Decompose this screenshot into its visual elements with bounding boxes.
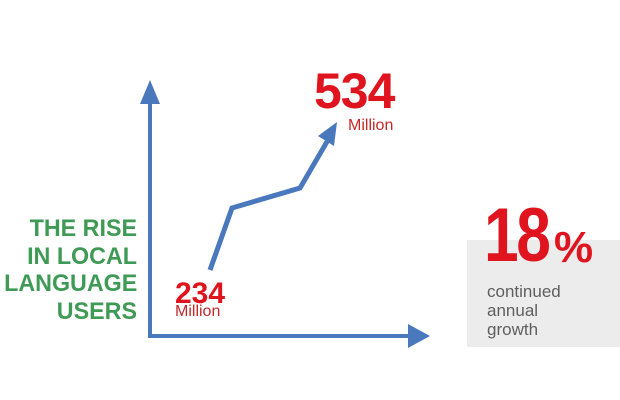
text: 18: 18 (484, 193, 548, 278)
text: 234: 234 (175, 277, 225, 310)
axis: vertical (140, 80, 160, 337)
panel: growth box (467, 240, 620, 347)
text: continued annual growth: annual (487, 301, 538, 320)
text: Million (234): Million (175, 303, 220, 320)
text: continued annual growth: growth (487, 320, 538, 339)
heading: the rise in local language users: THE RISE (30, 215, 137, 242)
heading: the rise in local language users (4, 215, 137, 324)
heading: the rise in local language users: LANGUAGE (4, 270, 137, 297)
text: Million (534): Million (348, 117, 393, 134)
axis: horizontal (148, 324, 430, 348)
heading: the rise in local language users: USERS (57, 298, 137, 324)
text: continued annual growth (487, 282, 561, 339)
text: 534: 534 (314, 63, 394, 119)
text: percent sign: % (554, 223, 593, 272)
heading: the rise in local language users: IN LOCAL (27, 242, 137, 270)
arrow: growth line (210, 122, 337, 270)
text: continued annual growth: continued (487, 282, 561, 301)
